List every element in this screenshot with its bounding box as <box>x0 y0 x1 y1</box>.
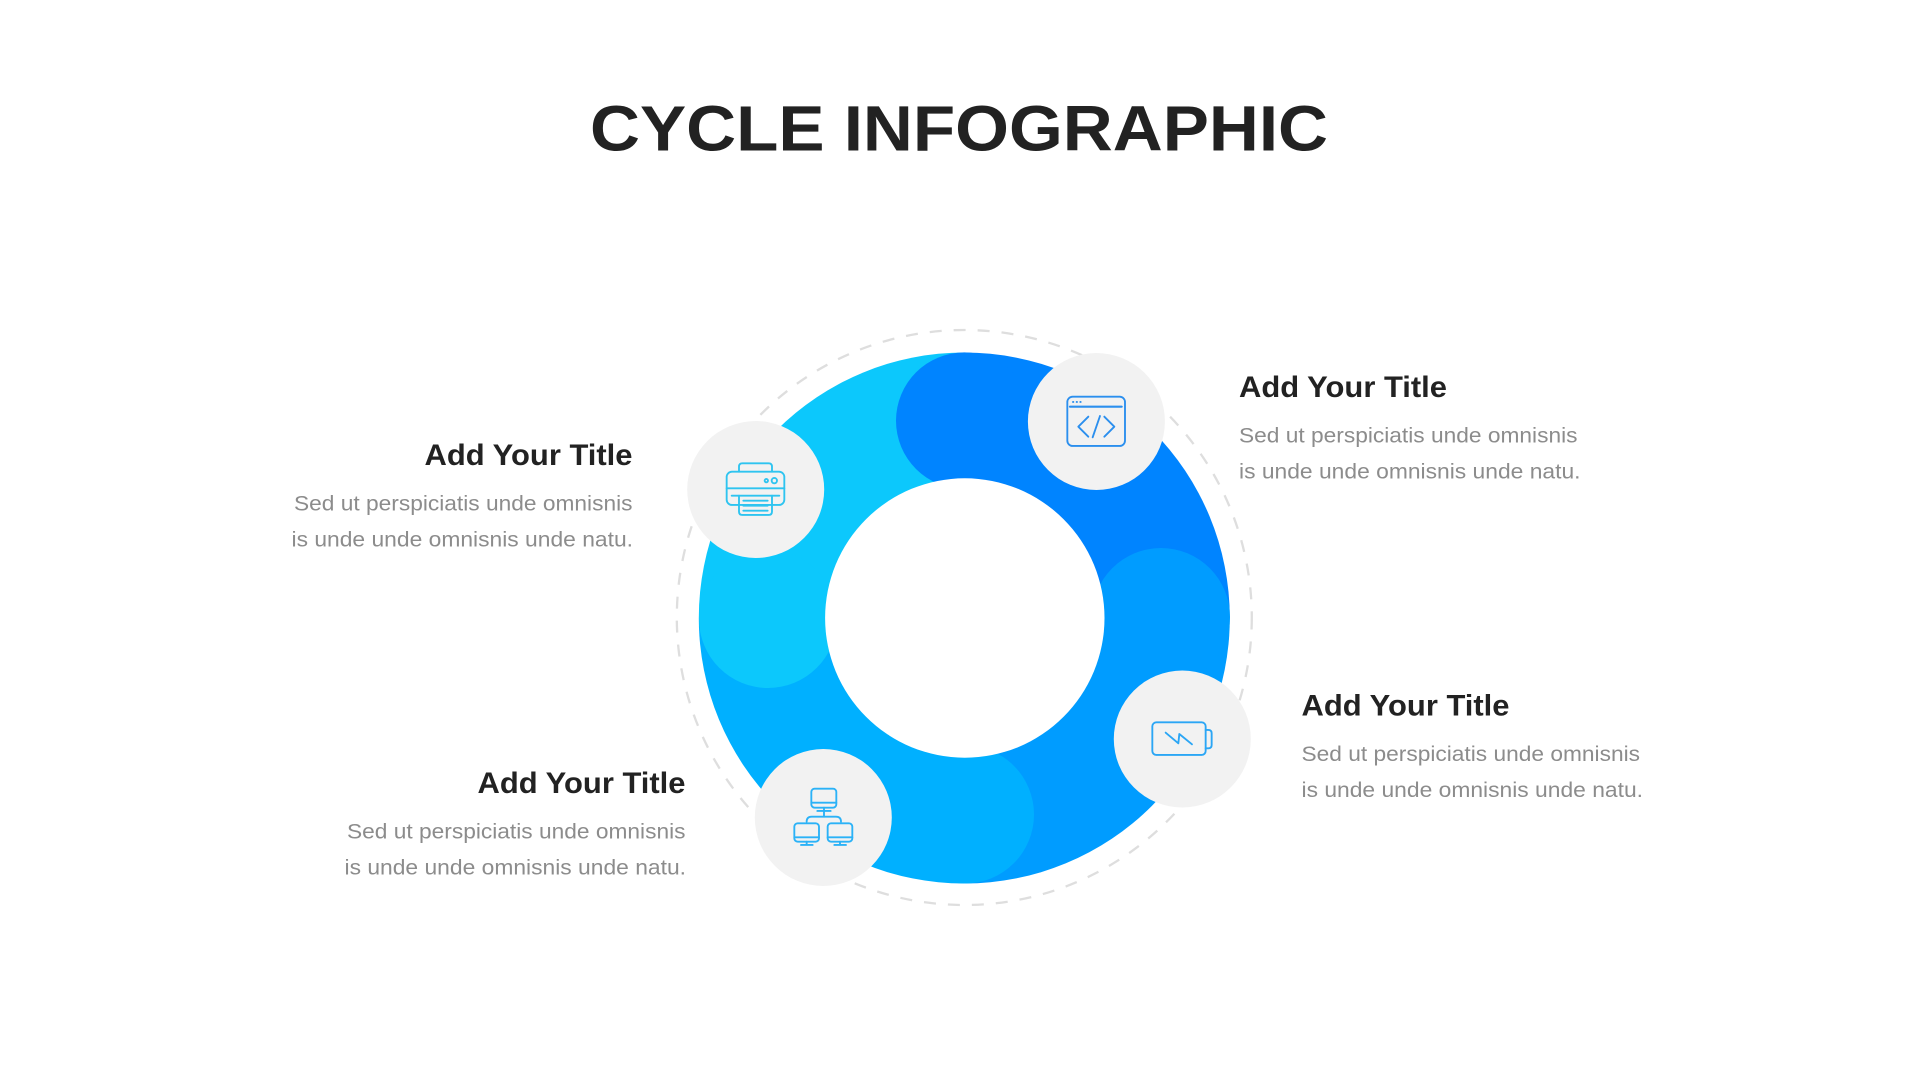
text block: network: is unde unde omnisnis unde natu. <box>344 855 686 879</box>
text block: code window: Sed ut perspiciatis unde omnisnis <box>1239 423 1578 447</box>
text block: network <box>344 767 686 879</box>
segment: top-right dark blue <box>964 352 1230 618</box>
icon badge: network <box>755 749 892 886</box>
icon badge: printer <box>687 421 824 558</box>
text block: battery: Sed ut perspiciatis unde omnisnis <box>1302 742 1640 766</box>
text block: printer: Sed ut perspiciatis unde omnisnis <box>294 491 632 515</box>
cap: dark blue <box>896 352 1033 489</box>
text block: printer <box>292 439 633 551</box>
text block: battery <box>1302 689 1643 802</box>
cycle donut chart <box>699 352 1230 884</box>
text block: network: Add Your Title <box>478 767 686 800</box>
icon: network <box>794 789 852 845</box>
icon: code window <box>1067 397 1125 446</box>
dashed orbit ring <box>677 330 1252 905</box>
text block: battery: Add Your Title <box>1302 689 1510 722</box>
cap: cyan <box>699 550 837 688</box>
text block: printer: is unde unde omnisnis unde natu. <box>292 527 633 551</box>
cap: mid blue <box>1092 548 1230 686</box>
cap: light blue <box>896 746 1034 884</box>
text block: battery: is unde unde omnisnis unde natu. <box>1302 778 1643 802</box>
text block: code window <box>1239 371 1580 483</box>
segment: bottom-left light blue <box>699 618 964 884</box>
title: CYCLE INFOGRAPHIC <box>590 92 1328 164</box>
segment: bottom-right mid blue <box>964 618 1230 884</box>
icon: battery <box>1152 722 1212 755</box>
segment: top-left cyan <box>699 352 964 618</box>
icon badge: code window <box>1028 353 1165 490</box>
text block: network: Sed ut perspiciatis unde omnisnis <box>347 819 686 843</box>
text block: code window: Add Your Title <box>1239 371 1447 404</box>
text block: printer: Add Your Title <box>424 439 632 472</box>
icon: printer <box>727 463 784 515</box>
text block: code window: is unde unde omnisnis unde natu. <box>1239 459 1580 483</box>
donut centre hole <box>825 478 1104 758</box>
icon badge: battery <box>1114 670 1251 808</box>
